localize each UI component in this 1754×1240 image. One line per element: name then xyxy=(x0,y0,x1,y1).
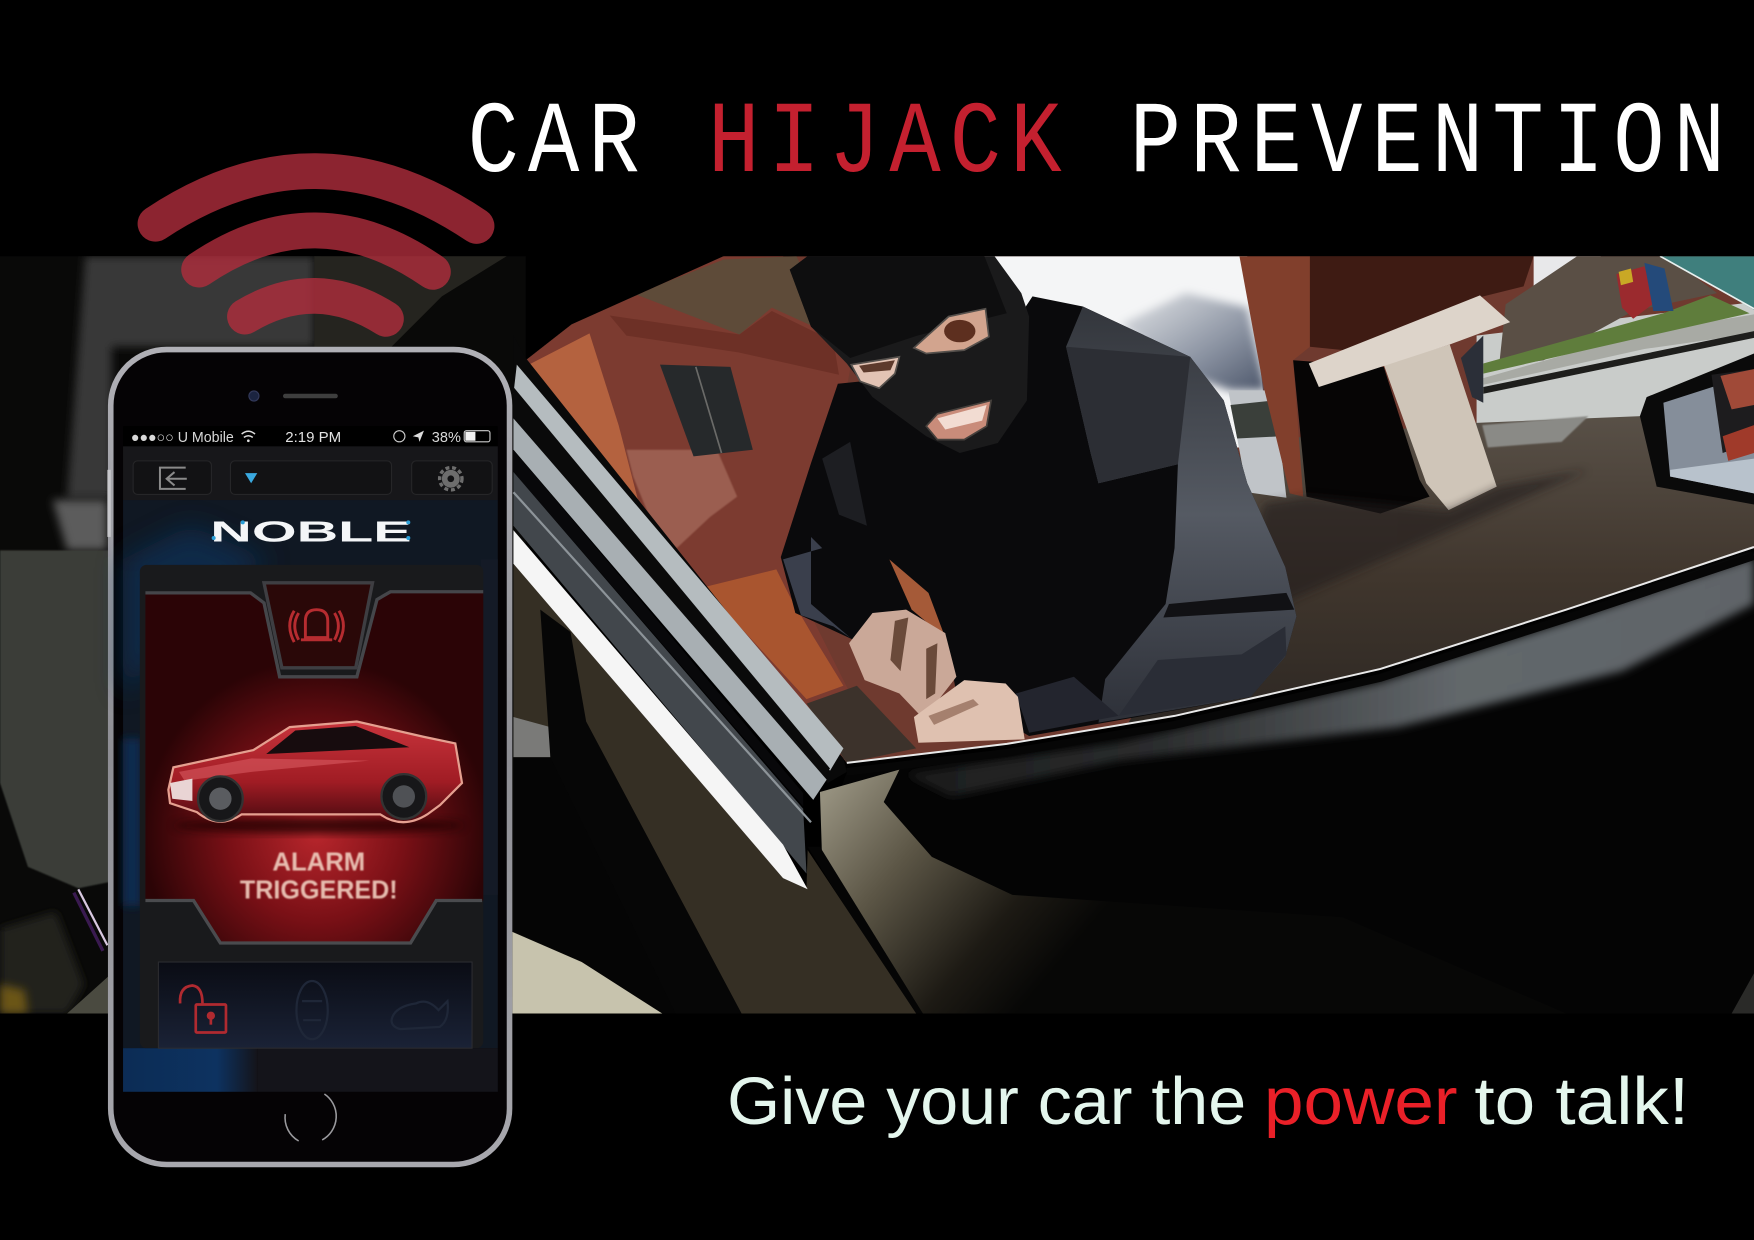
trees and grass xyxy=(1499,256,1717,367)
brick wall xyxy=(515,256,861,772)
window frame strips xyxy=(513,336,847,889)
app background xyxy=(123,500,498,1092)
status bar xyxy=(123,426,498,446)
alarm panel xyxy=(140,565,483,1048)
camera xyxy=(249,391,259,401)
bottom control panel xyxy=(158,962,472,1048)
interior lower left xyxy=(512,564,916,1016)
side mirror xyxy=(1640,353,1754,505)
title xyxy=(468,88,1734,203)
trunk icon xyxy=(392,1001,448,1029)
status bar: ●●●○○ U Mobile xyxy=(131,430,234,446)
tagline: Give your car the xyxy=(727,1064,1246,1139)
a-pillar shadow xyxy=(527,256,723,360)
hand left xyxy=(849,610,956,717)
sculpture xyxy=(1616,266,1656,319)
alarm icon xyxy=(290,610,343,642)
sky xyxy=(984,256,1270,447)
eye right xyxy=(914,309,989,353)
noble logo: NOBLE xyxy=(210,516,412,548)
window sill line xyxy=(847,547,1754,772)
hand right xyxy=(914,680,1025,743)
mouth xyxy=(926,400,991,440)
teal reflection xyxy=(1660,256,1754,310)
tagline: power xyxy=(1264,1064,1458,1139)
mask xyxy=(790,256,1029,453)
car xyxy=(168,722,464,833)
eye left xyxy=(851,357,899,388)
thief xyxy=(781,256,1296,743)
beige door trim xyxy=(820,770,1088,1014)
scene outside window xyxy=(515,256,1754,772)
noble logo xyxy=(210,516,412,548)
alarm text: ALARM xyxy=(272,848,365,876)
title: CAR xyxy=(468,88,649,203)
car interior left xyxy=(0,256,526,1013)
road and pavement xyxy=(1477,302,1754,425)
jacket sleeve highlight xyxy=(1066,307,1296,723)
status bar: 2:19 PM xyxy=(285,430,341,446)
ground xyxy=(1128,416,1754,722)
title: PREVENTION xyxy=(1130,88,1734,203)
alarm text: TRIGGERED! xyxy=(240,876,398,904)
nav bar xyxy=(123,446,498,500)
home button xyxy=(285,1094,336,1141)
unlock icon xyxy=(180,986,226,1032)
phone xyxy=(107,350,510,1164)
phone body xyxy=(111,350,510,1164)
soffit xyxy=(638,256,810,334)
alarm text xyxy=(240,848,398,904)
door panel xyxy=(808,554,1754,1013)
title: HIJACK xyxy=(708,88,1071,203)
wifi signal icon xyxy=(155,171,477,319)
jacket xyxy=(781,296,1296,736)
status bar: 38% xyxy=(432,430,461,446)
right brick pillar xyxy=(1239,256,1310,497)
red area xyxy=(145,592,483,943)
tagline: to talk! xyxy=(1474,1064,1689,1139)
photo: masked thief at car window xyxy=(0,256,1754,1016)
speaker xyxy=(283,394,338,398)
doors icon xyxy=(296,981,328,1039)
tagline xyxy=(727,1064,1689,1139)
